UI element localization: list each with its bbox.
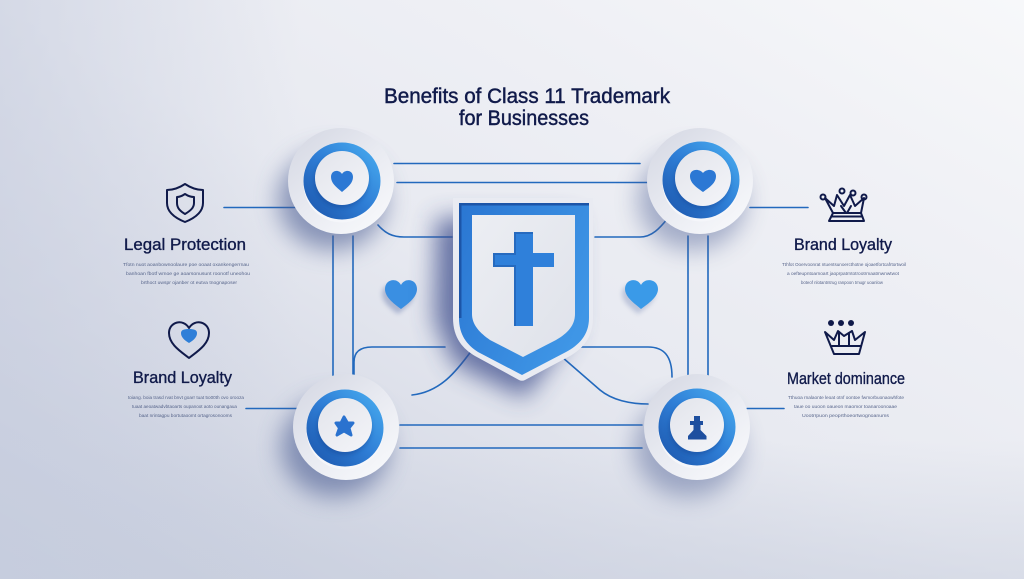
description text: Tfotn nuot aoanbownoolaure poe ooaat oxankengerrnau <box>123 262 249 267</box>
description text: baat nrintagpu bortutaoomt ortagrosonooms <box>139 413 233 418</box>
panel: market dominance: Market dominance <box>787 370 905 388</box>
connector network <box>224 164 808 448</box>
panel: market dominance <box>787 320 905 418</box>
description text: Tthfot Ooervoonrat ntuentsunoercthotne ojoaetfortcafrtortwoil <box>782 262 906 267</box>
icon: shield outline <box>167 184 203 222</box>
node: bottom-right chess piece button <box>634 374 750 497</box>
panel: legal protection <box>123 184 250 285</box>
panel: brand loyalty right: Brand Loyalty <box>794 236 893 254</box>
panel: brand loyalty left <box>128 322 244 418</box>
description text: taue oo uuoon oaueon maomor toanaroonoaae <box>794 404 897 409</box>
title: for Businesses <box>459 107 589 130</box>
description text <box>123 262 250 285</box>
description text: toiang. boia trasd rvat bnvt goarr tuat 5o00th ovo orooza <box>128 395 244 400</box>
title <box>384 85 670 130</box>
description text: tuaat aeoatwadvbtaoarts oupanoot aoto ounangaua <box>132 404 237 409</box>
panel: brand loyalty left: Brand Loyalty <box>133 369 233 387</box>
description text: Uootrrpuon peoprthoeortwognoanums <box>802 413 890 418</box>
heart right <box>622 280 658 314</box>
description text <box>782 262 906 285</box>
node: top-right heart button <box>638 128 753 250</box>
description text: a oefteupntoarnoart jaoprpatrntotrootrmaatmwnwtwot <box>787 271 900 276</box>
description text: Tthuoa rnalaonte leoat otnf oontoe fwmorbuonaowhfote <box>788 395 904 400</box>
icon: crown <box>820 188 866 221</box>
title: Benefits of Class 11 Trademark <box>384 85 670 108</box>
heart left <box>382 280 417 314</box>
description text <box>128 395 244 418</box>
node: bottom-left star button <box>281 374 399 497</box>
description text: boteof nlotantntrug ranpoon tmugr uoanlow <box>801 280 884 285</box>
panel: legal protection: Legal Protection <box>124 236 246 254</box>
description text: brthoct uwspr ojanber ot eutva tnognaposer <box>141 280 237 285</box>
panel: brand loyalty right <box>782 188 906 285</box>
icon: crown with three orbs <box>825 320 865 354</box>
description text: banhoan fbotf wmoe ge aoarsonusunt roonotf uneohou <box>126 271 250 276</box>
description text <box>788 395 904 418</box>
icon: heart outline <box>169 322 209 358</box>
shield face <box>472 215 575 357</box>
node: top-left heart button <box>278 128 394 250</box>
central shield <box>434 198 593 398</box>
shield cross <box>493 232 554 326</box>
